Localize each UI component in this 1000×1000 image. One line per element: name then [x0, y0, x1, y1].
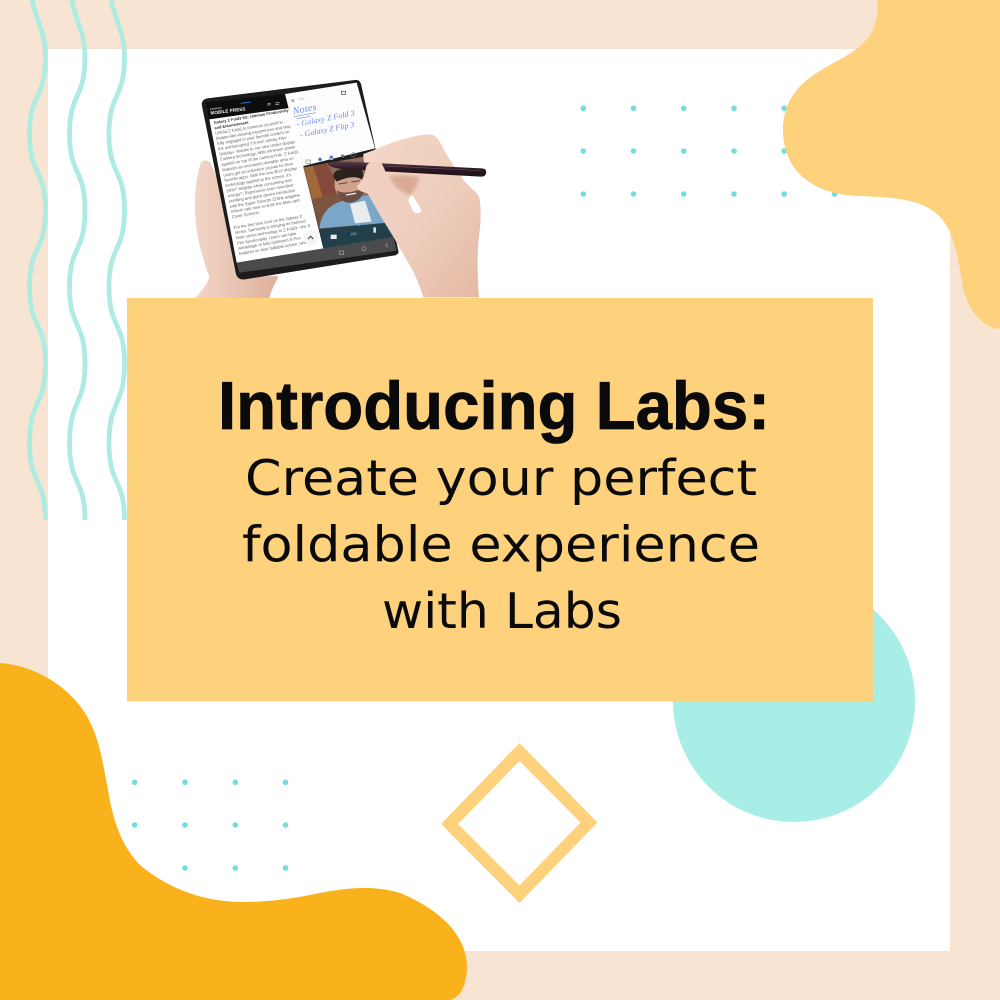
article panel: applied on top of the camera hole, Z Fold3 [221, 149, 299, 167]
article panel: features an increased viewable area so [222, 155, 294, 172]
article panel: Galaxy Z Fold3 5G: Ultimate Productivity [213, 107, 290, 125]
finger shading [388, 175, 419, 195]
title text [218, 368, 770, 640]
left hand [195, 160, 278, 298]
article panel: Note series technology to Z Fold3—the S [236, 223, 311, 240]
notes panel: Notes [291, 102, 318, 117]
article panel: Cover Screens. [231, 210, 260, 219]
dot grid: bottom left [132, 780, 288, 871]
article panel: features on their foldable screen, which is [239, 239, 314, 256]
article panel: For the first time ever on the Galaxy Z [233, 214, 303, 230]
call controls: 1/2x [350, 231, 357, 236]
right hand [357, 134, 481, 297]
article panel: Pen functionality. Users can take [237, 231, 297, 246]
scroll-up button [303, 230, 318, 245]
stylus pen [328, 161, 486, 177]
article panel: the uninterrupted 7.6-inch Infinity Flex [218, 135, 287, 151]
wavy lines [30, 0, 124, 520]
subtitle line 1: Create your perfect [245, 450, 757, 507]
navigation icons [340, 243, 388, 255]
blob: bottom left [0, 663, 467, 1000]
notes panel: - Galaxy Z Flip 3 [299, 120, 355, 139]
subtitle line 3: with Labs [382, 583, 622, 640]
article panel: advantage of fully optimized S Pen [238, 235, 302, 251]
person face [332, 166, 365, 204]
article panel: users get an unbroken canvas for their [223, 161, 294, 178]
heading line: Introducing Labs: [218, 368, 770, 444]
article panel: with the Super Smooth 120Hz adaptive [229, 192, 301, 209]
article panel: theater-like viewing experiences and stay [216, 123, 292, 141]
subtitle line 2: foldable experience [242, 516, 760, 574]
middle finger over stylus [357, 162, 403, 222]
note toolbar [306, 153, 355, 163]
article panel: energy¹¹. Experience even smoother [227, 182, 295, 198]
left app header [206, 94, 289, 119]
article panel: 29%¹⁰ brighter while consuming less [226, 177, 292, 193]
call controls [319, 223, 394, 255]
dot grid: top right [580, 106, 837, 197]
article panel: Display—thanks to our new Under display [219, 139, 296, 157]
article panel: series, Samsung is bringing its beloved [235, 218, 307, 235]
header status and title: MOBILE PRESS [210, 106, 246, 116]
article panel: technology applied to the screen, it's [225, 172, 292, 188]
video call [303, 155, 390, 229]
article panel: Unfold Z Fold3 to immerse yourself in [215, 119, 284, 136]
article panel [209, 107, 323, 263]
illustration: hands holding foldable phone with stylus [195, 80, 486, 298]
article panel: favorite apps. With the new Eco² display [224, 165, 298, 183]
left app header: SAMSUNG [210, 107, 222, 111]
person shirt [319, 195, 388, 228]
blob: top right [783, 0, 1000, 329]
notes panel: Title [298, 97, 305, 102]
teal circle [673, 580, 915, 822]
diamond outline [441, 743, 598, 903]
article panel: fully engaged in your favorite content on [217, 129, 290, 146]
yellow title panel [127, 298, 873, 702]
screen bezel lower strip [237, 237, 397, 273]
article panel: scrolling and quick device interaction [228, 188, 296, 204]
article panel: and Entertainment [214, 120, 249, 130]
phone body [202, 80, 398, 279]
article panel: refresh rate now on both the Main and [230, 197, 301, 214]
notes panel [285, 83, 375, 166]
article panel: Camera technology. With minimum pixels [220, 144, 295, 162]
notes panel: - Galaxy Z Fold 3 [296, 108, 356, 129]
